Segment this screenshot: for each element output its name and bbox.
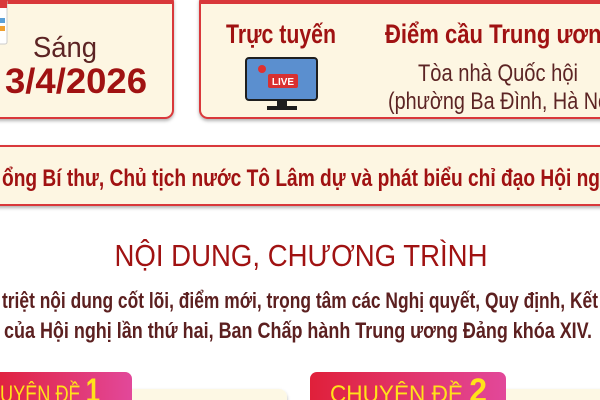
text: date: 3/4/2026 xyxy=(5,62,147,101)
text block: content xyxy=(2,288,599,343)
banner: leader xyxy=(0,146,600,205)
icon: calendar xyxy=(0,0,7,44)
panel: topic 2 xyxy=(310,372,600,400)
heading: NỘI DUNG, CHƯƠNG TRÌNH xyxy=(114,238,488,273)
text: online: Trực tuyến xyxy=(226,19,336,49)
icon: TV live: LIVE xyxy=(272,77,294,88)
text: morning: Sáng xyxy=(33,32,97,64)
icon: TV live xyxy=(246,58,317,110)
panel: date xyxy=(0,0,173,118)
panel: topic 1 xyxy=(0,372,287,400)
panel: venue xyxy=(200,0,600,118)
